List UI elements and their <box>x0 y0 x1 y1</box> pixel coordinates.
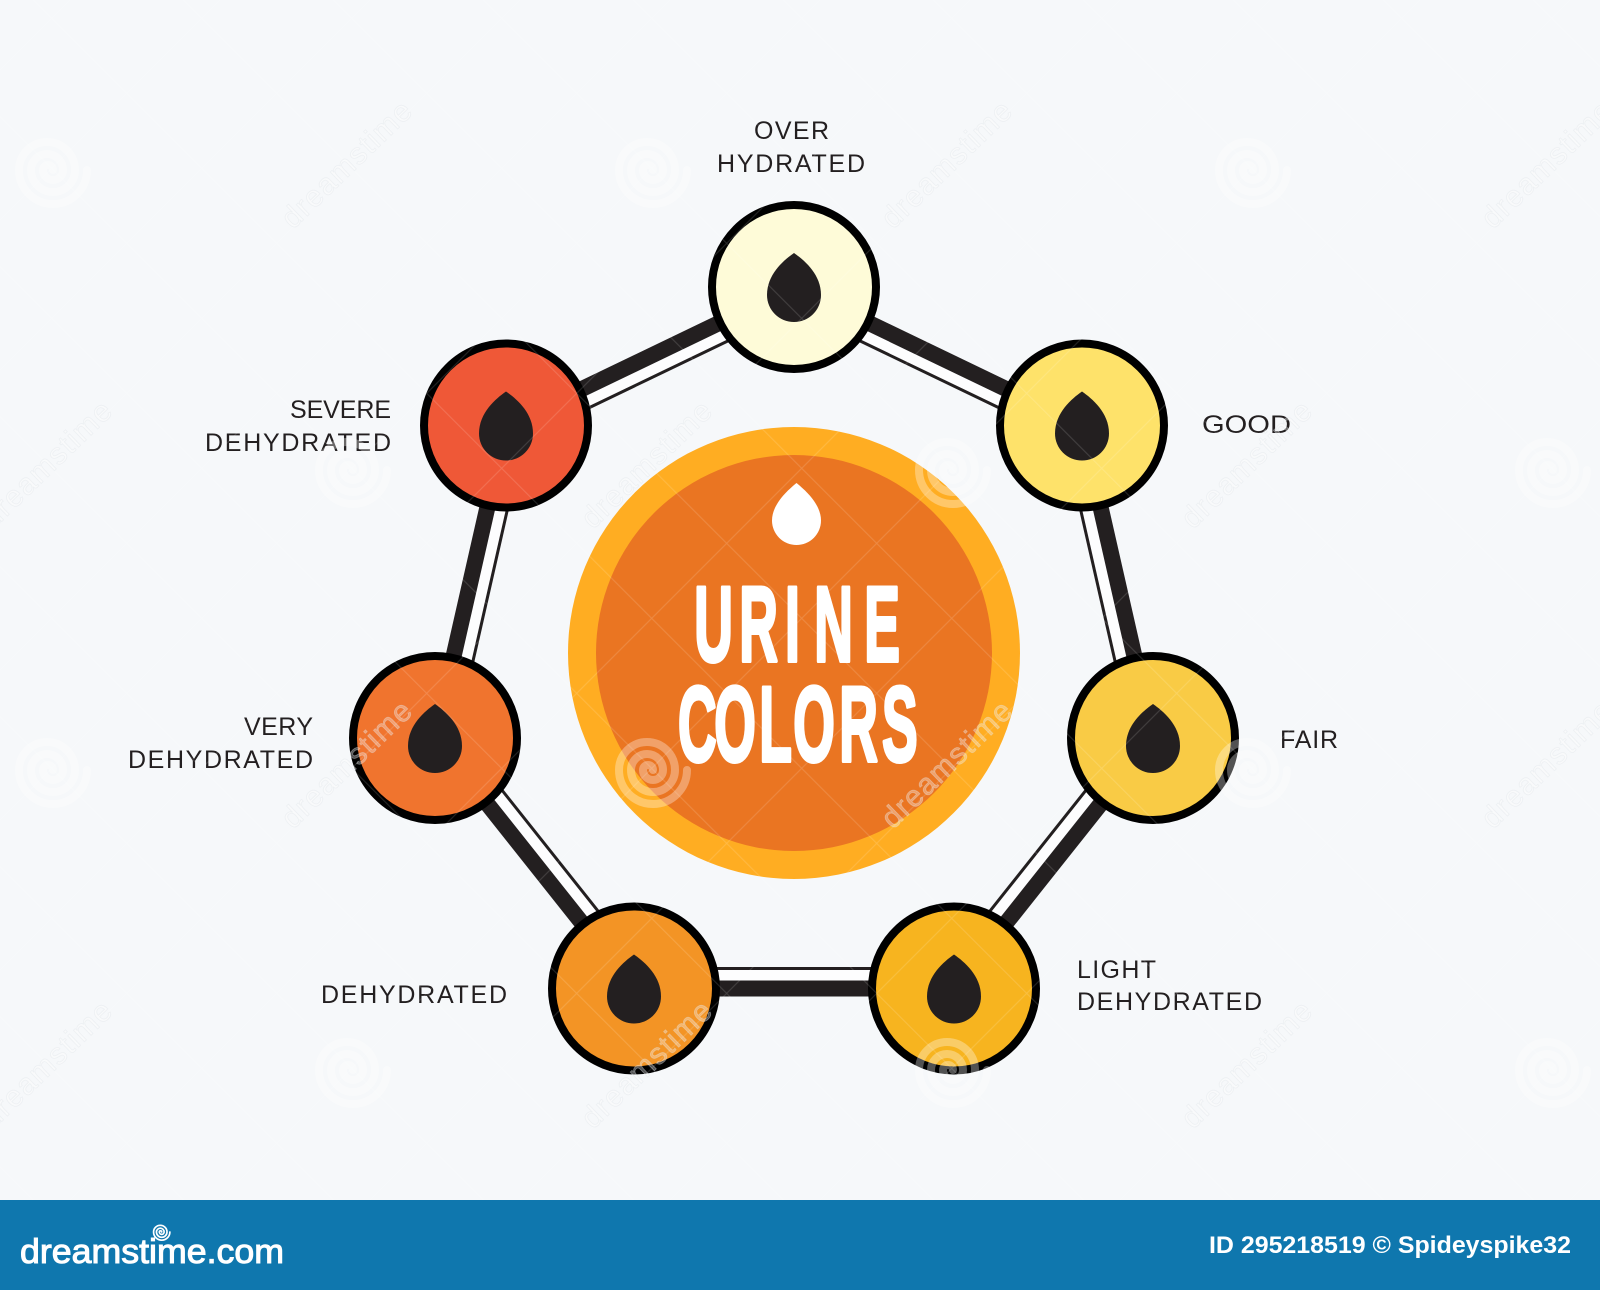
node: good <box>1000 344 1164 508</box>
label: dehydrated: DEHYDRATED <box>321 981 507 1009</box>
title <box>678 564 918 784</box>
node: fair <box>1071 656 1235 820</box>
icon: logo spiral <box>154 1225 170 1240</box>
title: URINE <box>694 564 900 684</box>
connector: very dehydrated to severe dehydrated <box>435 426 526 742</box>
connector: good to fair <box>1062 426 1153 742</box>
connector: severe dehydrated to over hydrated <box>506 287 803 444</box>
node: over hydrated <box>712 205 876 369</box>
label: over hydrated: HYDRATED <box>717 150 865 178</box>
label: very dehydrated: VERY <box>244 713 313 741</box>
label: light dehydrated <box>1077 956 1262 1016</box>
label: severe dehydrated: SEVERE <box>290 396 391 424</box>
label: very dehydrated: DEHYDRATED <box>128 746 313 774</box>
watermark spirals <box>19 142 1587 1104</box>
watermark text: dreamstime <box>1175 995 1319 1135</box>
central badge <box>568 427 1020 879</box>
watermark text: dreamstime <box>575 395 719 535</box>
label: severe dehydrated: DEHYDRATED <box>205 429 391 457</box>
label: fair: FAIR <box>1280 726 1338 754</box>
title: COLORS <box>678 664 918 784</box>
icon: white drop <box>772 483 821 545</box>
connector: light dehydrated to dehydrated <box>634 968 954 988</box>
node: dehydrated <box>552 906 716 1070</box>
watermark text: dreamstime <box>875 695 1019 835</box>
image id and credit: ID 295218519 © Spideyspike32 <box>1209 1232 1571 1259</box>
watermark text: dreamstime <box>1175 395 1319 535</box>
label: light dehydrated: DEHYDRATED <box>1077 988 1262 1016</box>
node: severe dehydrated <box>424 344 588 508</box>
label: light dehydrated: LIGHT <box>1077 956 1156 984</box>
connector: fair to light dehydrated <box>938 726 1153 988</box>
label: severe dehydrated <box>205 396 391 457</box>
watermark text: dreamstime <box>575 995 719 1135</box>
watermark text: dreamstime <box>275 95 419 235</box>
watermark text: dreamstime <box>875 95 1019 235</box>
node: light dehydrated <box>872 906 1036 1070</box>
node: very dehydrated <box>353 656 517 820</box>
connector: over hydrated to good <box>785 287 1082 444</box>
footer banner <box>0 1200 1600 1290</box>
logo text: dreamstime.com <box>20 1233 284 1271</box>
watermark text: dreamstime <box>275 695 419 835</box>
label: very dehydrated <box>128 713 313 774</box>
connector: dehydrated to very dehydrated <box>435 726 650 988</box>
label: over hydrated: OVER <box>754 117 829 145</box>
label: good: GOOD <box>1202 411 1291 439</box>
label: over hydrated <box>717 117 865 178</box>
